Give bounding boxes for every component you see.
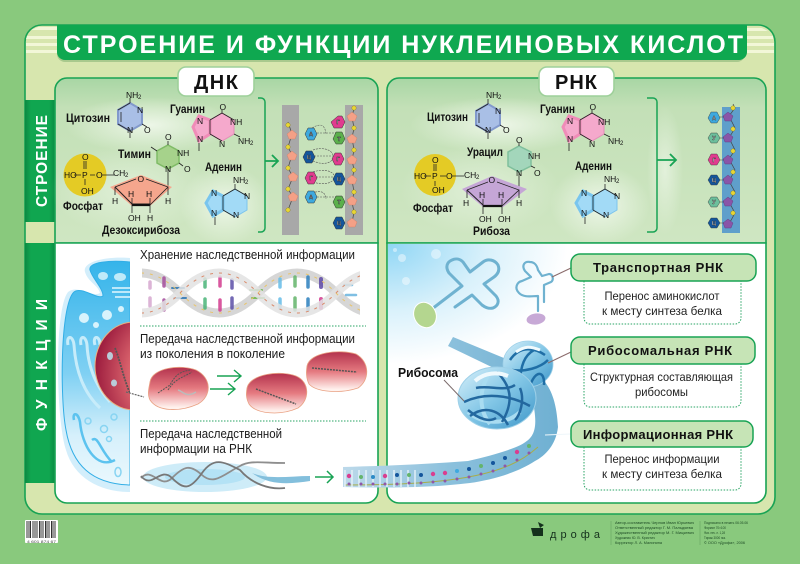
phosphate: Фосфат [63,201,103,213]
title: СТРОЕНИЕ И ФУНКЦИИ НУКЛЕИНОВЫХ КИСЛОТ [63,31,743,59]
ribose: OH [498,214,511,224]
panel: DNA functions [55,243,414,503]
guanine: N [567,134,573,144]
callout: messenger RNA: Перенос информации [604,452,720,466]
RNA single strand diagram [708,104,740,233]
DNA double strand diagram: Ц [307,155,311,161]
label: ribosome: Рибосома [398,366,459,380]
guanine: NH [238,136,250,146]
heading: inheritance: Передача наследственной информации [140,331,355,346]
adenine [575,161,620,224]
adenine: NH [604,174,616,184]
credits: Подписано в печать 06.05.06 [704,521,748,525]
guanine: NH [608,136,620,146]
DNA tab label [178,67,254,96]
DNA helix [142,268,360,318]
side tab: structure [25,100,55,222]
chromosome strand [126,392,144,397]
DNA double strand diagram: Ц [337,221,341,227]
cytosine: N [137,105,143,115]
ribose: H [516,198,522,208]
side tab: structure: СТРОЕНИЕ [34,115,51,207]
thymine: O [184,164,191,174]
DNA double strand diagram [282,105,363,235]
DNA double strand diagram: А [309,195,313,201]
credits: Формат 70×100 [704,526,726,530]
credits: Ответственный редактор Г. М. Пальдяева [615,526,693,530]
cell illustration [58,258,130,492]
publisher logo [531,522,601,542]
adenine: N [211,188,217,198]
guanine: O [220,102,226,112]
cytosine [427,90,510,139]
guanine: N [589,139,595,149]
DNA double strand diagram: Г [336,157,340,163]
callout: ribosomal RNA: Структурная составляющая [590,370,733,384]
deoxyribose: H [147,213,153,223]
uracil [467,135,541,188]
phosphate: 2 [125,173,129,179]
uracil: O [516,135,523,145]
publisher logo: дрофа [550,529,601,541]
uracil: N [516,168,522,178]
cytosine: N [485,125,491,135]
guanine: 2 [250,141,254,147]
nucleus: daughter one [246,373,307,413]
deoxyribose: H [165,196,171,206]
ribose: H [479,190,485,200]
cytosine: NH [126,90,138,100]
callout: messenger RNA: Информационная РНК [583,427,733,442]
thymine: O [165,132,172,142]
heading: inheritance: из поколения в поколение [140,346,285,361]
arrow [265,155,278,167]
cytosine: N [127,125,133,135]
RNA tab label [539,67,614,96]
adenine: N [614,191,620,201]
guanine: N [567,116,573,126]
side tab: functions [25,243,55,483]
DNA double strand diagram: Г [336,120,340,126]
mRNA band [343,337,558,488]
guanine: Гуанин [540,104,575,116]
credits [611,521,748,545]
cytosine: 2 [138,95,142,101]
deoxyribose: H [128,189,134,199]
ribosome small subunit [503,341,553,387]
guanine: NH [230,117,242,127]
deoxyribose: O [138,174,144,184]
heading: transcription: информации на РНК [140,441,252,456]
guanine [540,102,624,151]
callout: messenger RNA: к месту синтеза белка [602,467,722,481]
label: ribosome [398,366,464,401]
phosphate: O [82,152,89,162]
cytosine: O [144,125,151,135]
deoxyribose: H [112,196,118,206]
credits: Тираж 3000 экз. [704,536,726,540]
guanine: Гуанин [170,104,205,116]
bracket [258,98,265,232]
tRNA large [410,259,499,331]
uracil: NH [528,151,540,161]
adenine: 2 [245,180,249,186]
phosphate: O [96,170,103,180]
guanine: O [590,102,596,112]
adenine: N [581,208,587,218]
deoxyribose: Дезоксирибоза [102,225,181,237]
RNA single strand diagram: А [712,116,716,122]
credits: Художник Ю. В. Кристич [615,536,655,540]
phosphate: OH [81,186,94,196]
phosphate: CH [464,170,476,180]
phosphate: 2 [476,175,480,181]
phosphate: HO [64,170,77,180]
DNA double strand diagram: Т [337,137,341,143]
cytosine: O [503,125,510,135]
DNA double strand diagram: Т [337,200,341,206]
cytosine: NH [486,90,498,100]
callout: ribosomal RNA: Рибосомальная РНК [588,343,732,358]
arrow [657,154,676,166]
nucleus: before division [148,367,208,410]
ribose: H [463,198,469,208]
heading: inheritance [140,331,355,361]
DNA double strand diagram: Ц [337,177,341,183]
ribose: OH [479,214,492,224]
RNA single strand diagram: У [712,136,716,142]
heading: storage: Хранение наследственной информации [140,247,355,262]
credits: © ООО «Дрофа», 2006 [704,541,745,545]
phosphate [413,154,480,215]
cytosine: Цитозин [427,112,468,124]
callout: transport RNA: Транспортная РНК [593,260,723,275]
bracket [647,98,657,232]
adenine: N [233,210,239,220]
mRNA nucleotide chain [345,444,538,487]
thymine: NH [177,148,189,158]
RNA single strand diagram: Ц [712,221,716,227]
guanine: N [197,134,203,144]
phosphate: O [446,171,453,181]
side tab: functions: ФУНКЦИИ [34,299,51,431]
guanine: N [197,116,203,126]
RNA single strand diagram: Г [712,158,716,164]
arrow [315,471,333,483]
uracil: Урацил [467,147,503,159]
DNA double strand diagram: Г [309,176,313,182]
callout: transport RNA [552,254,756,324]
phosphate: HO [414,171,427,181]
RNA single strand diagram: У [712,200,716,206]
DNA double strand diagram: А [309,132,313,138]
RNA single strand diagram: Ц [712,178,716,184]
ribose: O [488,175,496,185]
guanine [170,102,254,151]
deoxyribose: H [146,189,152,199]
nucleus: daughter two [306,352,367,391]
adenine: NH [233,175,245,185]
credits: Корректор Л. А. Малинина [615,541,662,545]
phosphate: CH [113,168,125,178]
deoxyribose [102,174,181,237]
guanine: NH [598,117,610,127]
tRNA small [516,262,553,326]
barcode: 4 601 874 67 [27,539,57,544]
callout: ribosomal RNA: рибосомы [635,385,688,399]
adenine: N [603,210,609,220]
adenine: Аденин [575,161,612,173]
ribose: H [498,190,504,200]
panel: RNA functions [343,243,766,503]
ribose: Рибоза [473,226,511,238]
phosphate: P [82,170,88,180]
transcription illustration [141,462,310,492]
phosphate: Фосфат [413,203,453,215]
credits: Художественный редактор М. Г. Мицкевич [615,531,694,535]
adenine: N [211,208,217,218]
barcode [25,520,58,544]
guanine: N [219,139,225,149]
deoxyribose: OH [128,213,141,223]
thymine [118,132,191,186]
title bar [26,25,774,62]
heading: transcription: Передача наследственной [140,426,282,441]
RNA tab label: РНК [555,72,598,94]
callout: transport RNA: к месту синтеза белка [602,304,722,318]
cytosine: 2 [498,95,502,101]
panel: DNA structure [50,67,378,245]
phosphate: O [432,155,439,165]
adenine: 2 [616,179,620,185]
phosphate: OH [432,185,445,195]
thymine: Тимин [118,149,151,161]
credits: Автор-составитель Чернов Иван Юрьевич [615,521,694,525]
phosphate: P [432,171,438,181]
adenine: Аденин [205,162,242,174]
cytosine: Цитозин [66,113,110,125]
callout: ribosomal RNA [548,337,755,407]
DNA tab label: ДНК [194,72,239,94]
arrows [210,370,241,395]
adenine [205,162,250,225]
guanine: 2 [620,141,624,147]
cytosine: N [495,106,501,116]
uracil: O [534,168,541,178]
panel: RNA structure [387,67,766,245]
thymine: N [165,164,171,174]
callout: transport RNA: Перенос аминокислот [604,289,720,303]
ribose [462,175,527,238]
cytosine [66,90,151,138]
adenine: N [244,191,250,201]
credits: Физ. печ. л. 1,28 [704,531,725,535]
ribosome large subunit [458,367,536,429]
adenine: N [581,188,587,198]
phosphate [63,152,129,213]
callout: messenger RNA [545,421,753,490]
heading: transcription [140,426,282,456]
